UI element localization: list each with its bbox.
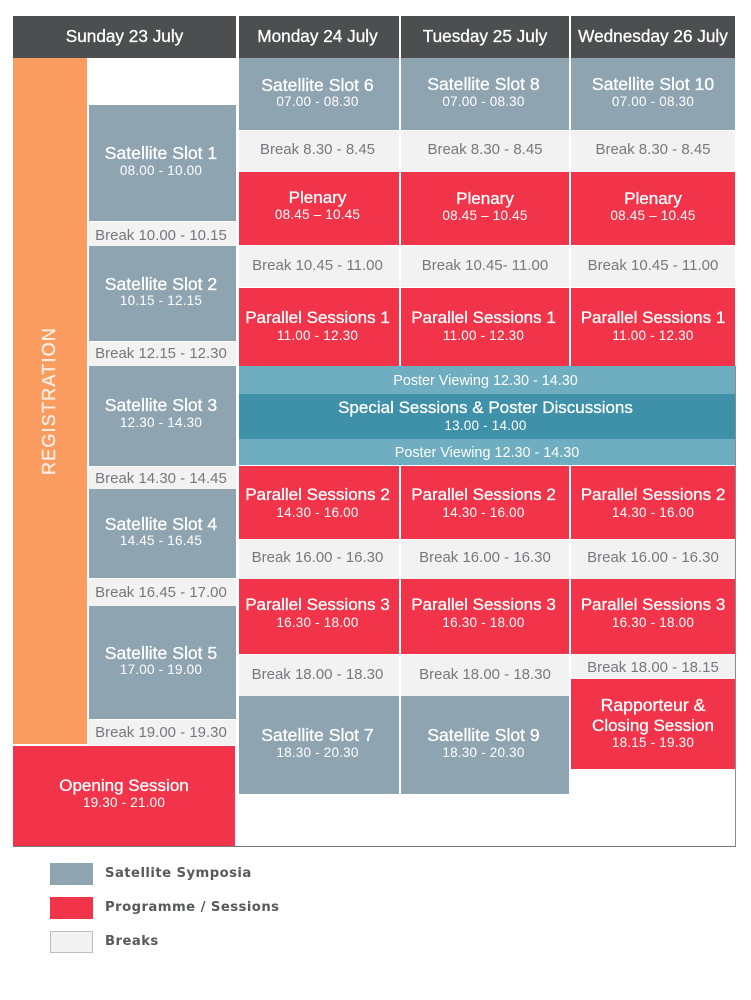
Tuesday: Parallel Sessions 1: Parallel Sessions 1 <box>411 308 556 327</box>
Monday: Plenary <box>239 172 399 245</box>
Sunday: break 19.00 <box>89 720 236 745</box>
Wednesday: Parallel Sessions 2: 14.30 - 16.00 <box>612 505 694 520</box>
Tuesday: break 10.45 <box>401 246 569 287</box>
Wednesday: Parallel Sessions 3 <box>571 579 735 654</box>
Monday: Satellite Slot 7 <box>239 696 399 794</box>
Sunday: break 14.30: Break 14.30 - 14.45 <box>95 470 227 487</box>
Wednesday: Parallel Sessions 2: Parallel Sessions 2 <box>581 485 725 504</box>
header: Tuesday 25 July <box>401 16 569 58</box>
Tuesday: break 18.00 <box>401 655 569 696</box>
Sunday: Satellite Slot 4 <box>89 489 236 578</box>
Wednesday: Satellite Slot 10: 07.00 - 08.30 <box>612 94 694 109</box>
Sunday: break 10.00 <box>89 222 236 246</box>
Wednesday: break 10.45: Break 10.45 - 11.00 <box>588 257 718 274</box>
Sunday: Satellite Slot 4: 14.45 - 16.45 <box>120 533 202 548</box>
header: Monday 24 July: Monday 24 July <box>257 26 378 46</box>
Monday: Plenary: Plenary <box>289 188 346 207</box>
Monday: Plenary: 08.45 – 10.45 <box>275 207 360 222</box>
Wednesday: break 16.00 <box>571 540 735 579</box>
Sunday: Satellite Slot 3: 12.30 - 14.30 <box>120 415 202 430</box>
Wednesday: Plenary: Plenary <box>624 189 682 208</box>
Special Sessions and Poster Discussions band: Special Sessions & Poster Discussions <box>338 398 633 417</box>
Poster Viewing band (upper) <box>239 366 735 394</box>
legend item: Breaks: Breaks <box>105 934 159 949</box>
legend item: Satellite Symposia: Satellite Symposia <box>105 866 252 881</box>
Sunday: Satellite Slot 2: 10.15 - 12.15 <box>120 293 202 308</box>
header: Sunday 23 July: Sunday 23 July <box>66 26 183 46</box>
Monday: break 18.00: Break 18.00 - 18.30 <box>252 666 383 683</box>
Sunday: Opening Session <box>13 746 235 846</box>
Tuesday: break 16.00: Break 16.00 - 16.30 <box>419 549 551 566</box>
legend <box>50 863 279 953</box>
Wednesday: break 8.30 <box>571 131 735 172</box>
Tuesday: Plenary: Plenary <box>456 189 514 208</box>
Wednesday: break 8.30: Break 8.30 - 8.45 <box>595 141 711 158</box>
chart frame: right and bottom border <box>13 366 736 847</box>
Poster Viewing band (upper): Poster Viewing 12.30 - 14.30 <box>393 373 578 389</box>
Wednesday: Rapporteur and Closing Session: Rapporteur & <box>601 695 705 715</box>
Monday: break 10.45: Break 10.45 - 11.00 <box>252 257 383 274</box>
Wednesday: break 18.00: Break 18.00 - 18.15 <box>587 659 719 676</box>
Tuesday: Satellite Slot 8: 07.00 - 08.30 <box>442 94 525 109</box>
Tuesday: Parallel Sessions 2 <box>401 466 569 539</box>
Tuesday: break 18.00: Break 18.00 - 18.30 <box>419 666 551 683</box>
Sunday: break 10.00: Break 10.00 - 10.15 <box>95 227 227 244</box>
Sunday: Satellite Slot 4: Satellite Slot 4 <box>105 514 217 534</box>
legend item: Breaks <box>50 931 159 953</box>
Sunday: break 12.15 <box>89 342 236 366</box>
Tuesday: Parallel Sessions 1: 11.00 - 12.30 <box>443 328 524 343</box>
Tuesday: break 16.00 <box>401 540 569 579</box>
Wednesday: Parallel Sessions 2 <box>571 466 735 539</box>
Monday: Parallel Sessions 3 <box>239 579 399 654</box>
Tuesday: break 8.30 <box>401 131 569 172</box>
Monday: Parallel Sessions 3: Parallel Sessions 3 <box>245 595 390 614</box>
Sunday: Satellite Slot 2: Satellite Slot 2 <box>105 274 217 294</box>
Sunday: Satellite Slot 2 <box>89 246 236 341</box>
Wednesday: Parallel Sessions 1: 11.00 - 12.30 <box>612 328 694 343</box>
header: Sunday 23 July <box>13 16 236 58</box>
Wednesday: Parallel Sessions 1: Parallel Sessions 1 <box>581 308 725 327</box>
Monday: break 16.00 <box>239 540 399 579</box>
registration bar <box>13 58 87 744</box>
Wednesday: Rapporteur and Closing Session: 18.15 - 19.30 <box>612 735 694 750</box>
Wednesday: Rapporteur and Closing Session: Closing Session <box>592 716 714 735</box>
Monday: Parallel Sessions 2: Parallel Sessions 2 <box>245 485 390 504</box>
Sunday: Satellite Slot 3: Satellite Slot 3 <box>105 395 217 415</box>
Sunday: Satellite Slot 1: Satellite Slot 1 <box>105 143 217 163</box>
Tuesday: Parallel Sessions 1 <box>401 288 569 366</box>
Special Sessions and Poster Discussions band: 13.00 - 14.00 <box>444 418 527 433</box>
header: Wednesday 26 July <box>571 16 735 58</box>
Monday: break 8.30 <box>239 131 399 172</box>
Monday: break 16.00: Break 16.00 - 16.30 <box>252 549 383 566</box>
header: Monday 24 July <box>239 16 399 58</box>
header: Tuesday 25 July: Tuesday 25 July <box>423 26 547 46</box>
Tuesday: Satellite Slot 9: 18.30 - 20.30 <box>442 745 525 760</box>
Poster Viewing band (lower) <box>239 439 735 465</box>
Tuesday: break 8.30: Break 8.30 - 8.45 <box>427 141 543 158</box>
Tuesday: Parallel Sessions 3: 16.30 - 18.00 <box>442 615 525 630</box>
Tuesday: Plenary <box>401 172 569 245</box>
Tuesday: Plenary: 08.45 – 10.45 <box>442 208 528 223</box>
Monday: Parallel Sessions 1 <box>239 288 399 366</box>
Wednesday: Rapporteur and Closing Session <box>571 679 735 769</box>
Monday: Satellite Slot 6: 07.00 - 08.30 <box>276 94 359 109</box>
Monday: Satellite Slot 6: Satellite Slot 6 <box>261 75 374 95</box>
Wednesday: break 18.00 <box>571 654 735 679</box>
Sunday: Satellite Slot 5 <box>89 606 236 719</box>
Sunday: Opening Session: 19.30 - 21.00 <box>83 795 165 810</box>
Sunday: Satellite Slot 1 <box>89 105 236 221</box>
Wednesday: Satellite Slot 10: Satellite Slot 10 <box>592 74 714 94</box>
legend item: Programme / Sessions: Programme / Sessions <box>105 900 279 915</box>
Poster Viewing band (lower): Poster Viewing 12.30 - 14.30 <box>395 445 579 461</box>
Wednesday: Parallel Sessions 3: Parallel Sessions 3 <box>581 595 725 614</box>
Tuesday: Parallel Sessions 2: 14.30 - 16.00 <box>442 505 525 520</box>
Sunday: break 16.45: Break 16.45 - 17.00 <box>95 584 227 601</box>
Monday: break 10.45 <box>239 246 399 287</box>
legend item: Programme / Sessions <box>50 897 279 919</box>
Monday: Satellite Slot 7: Satellite Slot 7 <box>261 725 374 745</box>
Wednesday: break 16.00: Break 16.00 - 16.30 <box>587 549 719 566</box>
Tuesday: Parallel Sessions 3 <box>401 579 569 654</box>
Monday: Parallel Sessions 3: 16.30 - 18.00 <box>276 615 359 630</box>
Monday: break 8.30: Break 8.30 - 8.45 <box>260 141 375 158</box>
Tuesday: Satellite Slot 9 <box>401 696 569 794</box>
Monday: break 18.00 <box>239 655 399 696</box>
Sunday: break 16.45 <box>89 579 236 606</box>
Wednesday: Plenary <box>571 172 735 245</box>
Sunday: Satellite Slot 5: 17.00 - 19.00 <box>120 662 202 677</box>
Wednesday: Parallel Sessions 3: 16.30 - 18.00 <box>612 615 694 630</box>
Tuesday: break 10.45: Break 10.45- 11.00 <box>422 257 548 274</box>
Wednesday: Parallel Sessions 1 <box>571 288 735 366</box>
Monday: Parallel Sessions 1: 11.00 - 12.30 <box>277 328 358 343</box>
Special Sessions and Poster Discussions band <box>239 394 735 439</box>
Tuesday: Parallel Sessions 2: Parallel Sessions 2 <box>411 485 556 504</box>
Tuesday: Satellite Slot 9: Satellite Slot 9 <box>427 725 540 745</box>
Monday: Satellite Slot 7: 18.30 - 20.30 <box>276 745 359 760</box>
Monday: Parallel Sessions 2 <box>239 466 399 539</box>
Sunday: break 12.15: Break 12.15 - 12.30 <box>95 345 227 362</box>
Sunday: Opening Session: Opening Session <box>59 776 189 795</box>
Wednesday: Plenary: 08.45 – 10.45 <box>610 208 696 223</box>
Monday: Parallel Sessions 1: Parallel Sessions 1 <box>245 308 390 327</box>
Sunday: break 14.30 <box>89 467 236 489</box>
Sunday: Satellite Slot 5: Satellite Slot 5 <box>105 643 217 663</box>
Monday: Parallel Sessions 2: 14.30 - 16.00 <box>276 505 359 520</box>
Wednesday: Satellite Slot 10 <box>571 58 735 130</box>
registration bar: REGISTRATION <box>39 327 59 475</box>
Tuesday: Parallel Sessions 3: Parallel Sessions 3 <box>411 595 556 614</box>
Monday: Satellite Slot 6 <box>239 58 399 130</box>
Sunday: break 19.00: Break 19.00 - 19.30 <box>95 724 227 741</box>
Wednesday: break 10.45 <box>571 246 735 287</box>
legend item: Satellite Symposia <box>50 863 252 885</box>
Tuesday: Satellite Slot 8: Satellite Slot 8 <box>427 74 540 94</box>
Sunday: Satellite Slot 3 <box>89 366 236 466</box>
Sunday: Satellite Slot 1: 08.00 - 10.00 <box>120 163 202 178</box>
Tuesday: Satellite Slot 8 <box>401 58 569 130</box>
header: Wednesday 26 July: Wednesday 26 July <box>578 26 728 46</box>
